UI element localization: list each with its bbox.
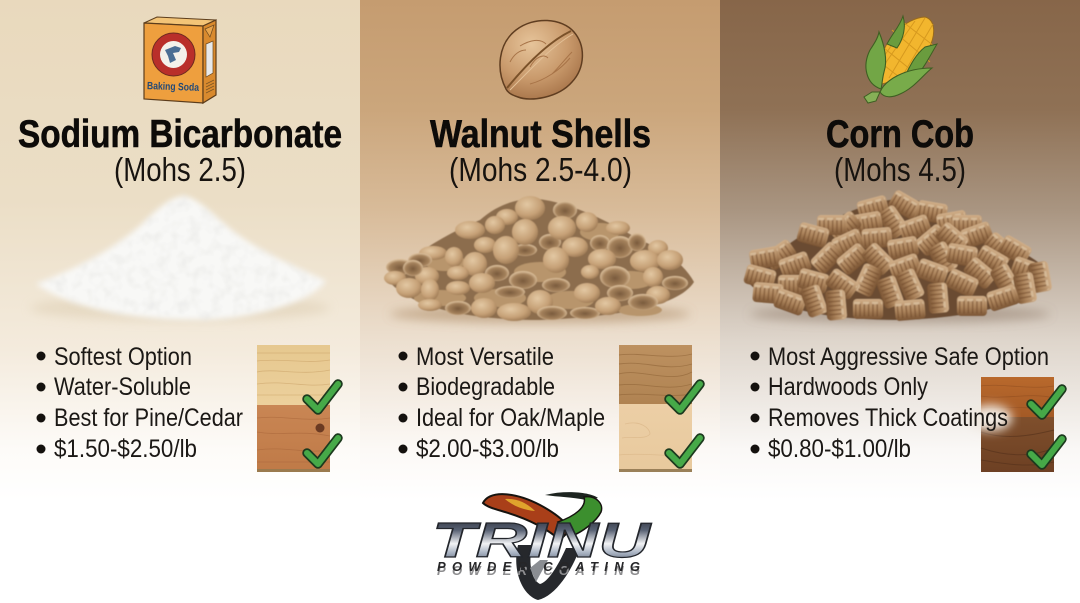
heading: Sodium Bicarbonate: Sodium Bicarbonate [18,113,342,156]
panel: walnut shells background [360,0,720,500]
bullet list: sodium bicarbonate: Best for Pine/Cedar [54,404,243,432]
bullet list: sodium bicarbonate: Water-Soluble [54,373,191,401]
text halo over swatch [968,405,1012,431]
logo: Trinu Powder Coating [432,492,652,600]
icon: walnut [500,20,582,99]
icon: check mark pine [307,384,338,410]
subheading: Mohs 2.5-4.0: (Mohs 2.5-4.0) [449,151,632,188]
bullet list: sodium bicarbonate: Softest Option [54,343,192,371]
wood swatches: oak and maple [619,345,692,472]
wood swatches: pine and cedar [257,345,330,472]
illustration: corn cob pellet pile [743,189,1052,323]
bullet list: corn cob [750,343,1049,463]
wood swatches: hardwoods [981,377,1054,472]
panel: corn cob background [720,0,1080,500]
bullet list: walnut shells: Biodegradable [416,373,555,401]
bullet list: corn cob: Hardwoods Only [768,373,928,401]
icon: corn cob [864,16,937,103]
subheading: Mohs 4.5: (Mohs 4.5) [834,151,966,188]
bullet list: walnut shells: $2.00-$3.00/lb [416,435,559,463]
illustration: baking soda pile [30,196,330,321]
icon: check mark hardwood one [1031,389,1062,415]
heading: Walnut Shells: Walnut Shells [430,113,651,156]
bullet list: sodium bicarbonate [36,343,243,463]
subheading: Mohs 2.5: (Mohs 2.5) [114,151,246,188]
icon: baking soda box: Baking Soda [147,80,199,94]
bullet list: walnut shells: Most Versatile [416,343,554,371]
logo: Trinu Powder Coating: POWDER COATING [437,559,640,574]
logo: Trinu Powder Coating: TRINU [432,514,652,568]
bullet list: walnut shells: Ideal for Oak/Maple [416,404,605,432]
logo: Trinu Powder Coating: POWDER COATING [437,563,640,578]
illustration: walnut shell pile [384,196,694,323]
icon: check mark oak [669,384,700,410]
bullet list: sodium bicarbonate: $1.50-$2.50/lb [54,435,197,463]
icon: baking soda box [144,17,216,103]
bullet: removes thick coatings: Removes Thick Coatings [768,404,1008,432]
panel: sodium bicarbonate background [0,0,360,500]
bullet list: walnut shells [398,343,605,463]
heading: Corn Cob: Corn Cob [826,113,974,156]
bullet list: corn cob: $0.80-$1.00/lb [768,435,911,463]
icon: check mark hardwood two [1031,439,1062,465]
icon: check mark maple [669,438,700,464]
icon: check mark cedar [307,438,338,464]
